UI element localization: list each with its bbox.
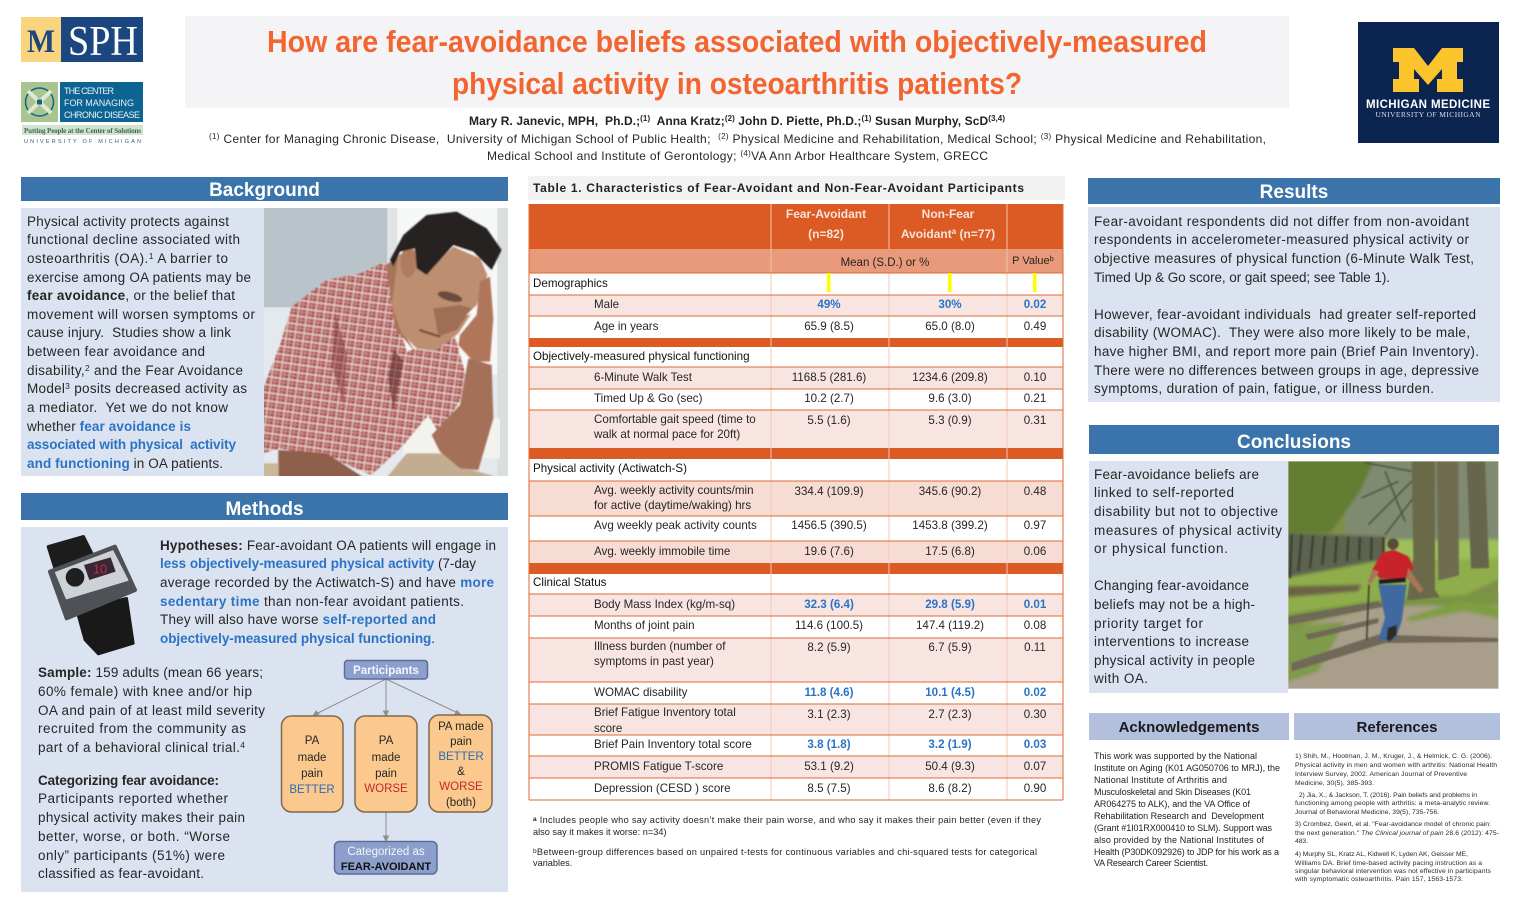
- logo: MSPH: [21, 17, 143, 65]
- panel: references: [1294, 713, 1500, 883]
- table header: Fear-Avoidant: [786, 207, 866, 221]
- text: categorizing fear avoidance: [38, 773, 245, 881]
- text: sample: 60% female) with knee and/or hip: [38, 684, 252, 699]
- logo: Center for Managing Chronic Disease: FOR MANAGING: [64, 98, 134, 108]
- text: background: functional decline associated with: [27, 232, 240, 247]
- row: age: 65.9 (8.5): [804, 320, 854, 333]
- icon: actiwatch: 10: [93, 562, 107, 576]
- heading: methods: Methods: [225, 499, 304, 520]
- text: references: 3) Crombez, Geert, et al. "Fear-avoidance model of chronic pain:: [1295, 821, 1491, 828]
- table footnotes: b: [533, 848, 537, 855]
- authors and affiliations: (4): [740, 149, 751, 158]
- row: gait speed: 5.3 (0.9): [928, 414, 972, 427]
- row: WOMAC: 10.1 (4.5): [925, 686, 975, 699]
- row: pain inventory: 0.03: [1024, 738, 1047, 751]
- row: 6-minute walk: [594, 371, 1046, 384]
- text: sample: 4: [240, 740, 245, 750]
- box: PA made pain better and worse: WORSE: [439, 781, 483, 793]
- table header: Mean (S.D.) or %: [841, 257, 929, 269]
- box: PA made pain better and worse: pain: [450, 736, 472, 748]
- text: sample: Sample: 159 adults (mean 66 years;: [38, 665, 263, 680]
- box: PA made pain worse: [355, 716, 417, 812]
- row: illness burden: 0.11: [1024, 641, 1046, 654]
- text: background: 3: [65, 381, 70, 391]
- box: PA made pain worse: WORSE: [364, 783, 408, 795]
- logo: Center for Managing Chronic Disease: [21, 82, 143, 145]
- text: references: Physical activity in men and women with arthritis: National Health: [1295, 762, 1497, 769]
- row: BMI: 32.3 (6.4): [804, 598, 854, 611]
- text: categorizing fear avoidance: classified as fear-avoidant.: [38, 866, 204, 881]
- box: PA made pain better and worse: (both): [446, 797, 476, 809]
- text: background: [26, 214, 256, 471]
- authors and affiliations: (2): [718, 132, 729, 141]
- heading: references: [1294, 713, 1500, 740]
- row: joint pain: Months of joint pain: [594, 619, 695, 632]
- text: conclusions: physical activity in people: [1094, 653, 1255, 668]
- authors and affiliations: (3): [1041, 132, 1052, 141]
- text: conclusions: priority target for: [1094, 616, 1204, 631]
- box: PA made pain better: made: [298, 752, 326, 764]
- text: references: the next generation." The Clinical journal of pain 28.6 (2012): 475-: [1295, 830, 1499, 837]
- text: sample: [38, 665, 265, 755]
- text: results: Timed Up & Go score, or gait speed; see Table 1).: [1094, 270, 1390, 285]
- table footnotes: variables.: [533, 858, 572, 868]
- row: immobile time: [594, 545, 1046, 558]
- text: background: A barrier to: [154, 251, 228, 266]
- heading: acknowledgements: [1089, 713, 1289, 740]
- row: activity counts: 0.48: [1024, 485, 1046, 498]
- table header: [529, 204, 1063, 273]
- row: male: [594, 298, 1046, 311]
- text: hypotheses: sedentary time than non-fear avoidant patients.: [160, 594, 464, 609]
- photo: man holding his head: [257, 208, 513, 482]
- text: conclusions: linked to self-reported: [1094, 485, 1234, 500]
- row: timed up and go: [594, 392, 1046, 405]
- text: background: whether fear avoidance is: [26, 419, 191, 434]
- row: fatigue inventory: score: [594, 722, 622, 735]
- box: PA made pain worse: PA: [379, 735, 394, 747]
- row: 6-minute walk: 1168.5 (281.6): [792, 371, 866, 384]
- text: sample: recruited from the community as: [38, 721, 246, 736]
- row: immobile time: Avg. weekly immobile time: [594, 545, 730, 558]
- text: references: with symptomatic osteoarthritis. Pain 157, 1563-1573.: [1294, 876, 1463, 883]
- text: hypotheses: objectively-measured physical functioning.: [160, 631, 435, 646]
- row: gait speed: 0.31: [1024, 414, 1046, 427]
- text: acknowledgements: Rehabilitation Research and Development: [1094, 811, 1264, 821]
- table header: Avoidant: [901, 227, 952, 241]
- box: PA made pain better: BETTER: [289, 784, 335, 796]
- logo: Michigan Medicine: UNIVERSITY OF MICHIGAN: [1376, 110, 1481, 119]
- box: categorized as fear-avoidant: FEAR-AVOIDANT: [341, 861, 431, 873]
- text: acknowledgements: also provided by the National Institutes of: [1094, 835, 1264, 845]
- text: acknowledgements: This work was supported by the National: [1094, 751, 1257, 761]
- table title: [528, 176, 1065, 200]
- row: pain inventory: 3.8 (1.8): [807, 738, 851, 751]
- photo: man walking with cane on tree-lined path: [1288, 461, 1498, 689]
- row: PROMIS: 0.07: [1024, 760, 1046, 773]
- table 1: [529, 204, 1063, 800]
- row: depression: 8.5 (7.5): [807, 782, 851, 795]
- logo: MSPH: M: [27, 24, 55, 60]
- panel: background: [21, 177, 513, 482]
- text: background: cause injury. Studies show a link: [27, 325, 231, 340]
- row: fatigue inventory: 2.7 (2.3): [928, 708, 972, 721]
- text: background: posits decreased activity as: [70, 381, 247, 396]
- logo: Center for Managing Chronic Disease: THE CENTER: [64, 86, 114, 96]
- row: age: [594, 320, 1046, 333]
- text: conclusions: disability but not to objective: [1094, 504, 1278, 519]
- row: gait speed: walk at normal pace for 20ft): [593, 428, 740, 441]
- text: conclusions: measures of physical activity: [1094, 523, 1282, 538]
- box: PA made pain better and worse: [429, 715, 492, 812]
- text: results: symptoms, duration of pain, fatigue, or illness burden.: [1094, 381, 1434, 396]
- text: background: between fear avoidance and: [27, 344, 205, 359]
- panel: results: [1088, 178, 1500, 402]
- box: PA made pain better: [282, 716, 343, 812]
- text: results: objective measures of physical function (6-Minute Walk Test,: [1094, 251, 1474, 266]
- heading: methods: [21, 493, 508, 520]
- logo: MSPH: SPH: [68, 19, 138, 65]
- row: WOMAC: WOMAC disability: [594, 686, 688, 699]
- row: PROMIS: PROMIS Fatigue T-score: [594, 760, 723, 773]
- heading: background: [21, 177, 508, 201]
- row: immobile time: 0.06: [1024, 545, 1046, 558]
- text: hypotheses: Hypotheses: Fear-avoidant OA patients will engage in: [160, 538, 496, 553]
- table header: b: [1050, 254, 1054, 263]
- text: conclusions: or physical function.: [1094, 541, 1228, 556]
- row: peak counts: Avg weekly peak activity counts: [594, 519, 757, 532]
- heading: results: Results: [1260, 182, 1328, 203]
- box: categorized as fear-avoidant: [334, 842, 437, 874]
- text: results: [1094, 214, 1479, 396]
- text: categorizing fear avoidance: only” participants (51%) were: [38, 848, 225, 863]
- row: gait speed: Comfortable gait speed (time to: [594, 413, 756, 426]
- text: background: fear avoidance, or the belief that: [27, 288, 235, 303]
- logo: Center for Managing Chronic Disease: UNIVERSITY OF MICHIGAN: [24, 139, 141, 145]
- text: background: osteoarthritis (OA).: [27, 251, 148, 266]
- row: illness burden: 6.7 (5.9): [928, 641, 972, 654]
- table header: Non-Fear: [922, 207, 975, 221]
- table header: (n=82): [808, 227, 844, 241]
- text: results: disability (WOMAC). They were also more likely to be male,: [1094, 325, 1470, 340]
- row: pain inventory: 3.2 (1.9): [928, 738, 972, 751]
- text: conclusions: interventions to increase: [1094, 634, 1249, 649]
- text: background: Model: [27, 381, 65, 396]
- text: categorizing fear avoidance: Categorizing fear avoidance:: [38, 773, 219, 788]
- text: hypotheses: less objectively-measured physical activity (7-day: [160, 556, 476, 571]
- row: PROMIS: 50.4 (9.3): [925, 760, 975, 773]
- row: fatigue inventory: 0.30: [1024, 708, 1046, 721]
- row: male: 49%: [817, 298, 841, 311]
- table footnotes: also say it makes it worse: n=34): [533, 827, 667, 837]
- text: acknowledgements: VA Research Career Scientist.: [1094, 858, 1208, 868]
- authors and affiliations: Medical School and Institute of Gerontology;: [487, 149, 736, 163]
- row: age: 0.49: [1024, 320, 1046, 333]
- text: results: There were no differences between groups in age, depressive: [1094, 363, 1479, 378]
- text: references: 1) Shih, M., Hootman, J. M., Kruger, J., & Helmick, C. G. (2006).: [1295, 753, 1492, 760]
- logo: Center for Managing Chronic Disease: Putting People at the Center of Solutions: [24, 127, 141, 135]
- authors and affiliations: [209, 114, 1266, 163]
- text: conclusions: [1093, 467, 1282, 686]
- row: timed up and go: 9.6 (3.0): [928, 392, 972, 405]
- text: sample: OA and pain of at least mild severity: [38, 703, 265, 718]
- row: 6-minute walk: 1234.6 (209.8): [912, 371, 988, 384]
- text: background: 1: [149, 251, 154, 261]
- authors and affiliations: (1): [640, 114, 650, 123]
- section: demographics: Demographics: [533, 277, 608, 290]
- text: conclusions: with OA.: [1093, 671, 1148, 686]
- text: background: associated with physical activity: [27, 437, 236, 452]
- arrows: [313, 679, 461, 841]
- row: BMI: 29.8 (5.9): [925, 598, 975, 611]
- text: references: 4) Murphy SL, Kratz AL, Kidwell K, Lyden AK, Geisser ME,: [1295, 851, 1468, 858]
- box: PA made pain better and worse: &: [457, 766, 465, 778]
- text: background: and the Fear Avoidance: [90, 363, 243, 378]
- row: gait speed: 5.5 (1.6): [807, 414, 851, 427]
- box: participants: [344, 660, 428, 679]
- box: categorized as fear-avoidant: Categorized as: [347, 846, 425, 858]
- logo: Michigan Medicine: MICHIGAN MEDICINE: [1366, 99, 1490, 111]
- row fills: [529, 204, 1063, 800]
- row: fatigue inventory: Brief Fatigue Inventory total: [594, 706, 736, 719]
- text: acknowledgements: National Institute of Arthritis and: [1094, 775, 1227, 785]
- authors and affiliations: Center for Managing Chronic Disease, University of Michigan School of Public Health;: [220, 132, 718, 146]
- text: references: 2) Jia, X., & Jackson, T. (2016). Pain beliefs and problems in: [1297, 792, 1477, 799]
- box: PA made pain better and worse: PA made: [438, 721, 484, 733]
- text: results: However, fear-avoidant individuals had greater self-reported: [1094, 307, 1476, 322]
- row: depression: Depression (CESD ) score: [594, 782, 731, 795]
- authors and affiliations: (1): [862, 114, 872, 123]
- row: depression: 8.6 (8.2): [928, 782, 972, 795]
- text: references: 483.: [1295, 838, 1308, 845]
- text: references: Williams DA. Brief time-based activity pacing instruction as a: [1295, 860, 1482, 867]
- table title: Table 1. Characteristics of Fear-Avoidant and Non-Fear-Avoidant Participants: [533, 181, 1024, 195]
- box: PA made pain better and worse: BETTER: [438, 751, 484, 763]
- row: timed up and go: 10.2 (2.7): [804, 392, 854, 405]
- text: background: and functioning in OA patients.: [27, 456, 223, 471]
- text: references: singular behavioral intervention was not effective in participants: [1295, 868, 1492, 875]
- text: references: Interview Survey, 2002. American Journal of Preventive: [1295, 771, 1467, 778]
- row: BMI: Body Mass Index (kg/m-sq): [594, 598, 735, 611]
- row: pain inventory: [594, 738, 1047, 751]
- table footnotes: Between-group differences based on unpaired t-tests for continuous variables and chi-squared tests for categorical: [537, 847, 1037, 857]
- table header: P Value: [1012, 255, 1050, 267]
- table header: a: [952, 227, 957, 236]
- row: WOMAC: 0.02: [1024, 686, 1046, 699]
- row: gait speed: [593, 413, 1046, 441]
- text: references: Medicine, 30(5), 385-393.: [1295, 780, 1374, 787]
- row: peak counts: 0.97: [1024, 519, 1046, 532]
- heading: conclusions: Conclusions: [1237, 432, 1351, 453]
- section: clinical status: Clinical Status: [533, 576, 607, 589]
- text: acknowledgements: Musculoskeletal and Skin Diseases (K01: [1094, 787, 1251, 797]
- row: fatigue inventory: 3.1 (2.3): [807, 708, 851, 721]
- heading: conclusions: [1089, 425, 1499, 454]
- row: WOMAC: [594, 686, 1046, 699]
- row: immobile time: 17.5 (6.8): [925, 545, 975, 558]
- section: objectively-measured physical functioning: Objectively-measured physical functioning: [533, 350, 750, 363]
- heading: acknowledgements: Acknowledgements: [1119, 719, 1259, 736]
- table header: (n=77): [956, 227, 995, 241]
- authors and affiliations: (3,4): [988, 114, 1005, 123]
- text: background: exercise among OA patients may be: [27, 270, 251, 285]
- row: activity counts: 345.6 (90.2): [919, 485, 981, 498]
- row: pain inventory: Brief Pain Inventory total score: [594, 738, 752, 751]
- text: references: [1294, 753, 1499, 883]
- authors and affiliations: John D. Piette, Ph.D.;: [735, 114, 861, 128]
- table footnotes: Includes people who say activity doesn’t make their pain worse, and who say it makes their pain better (even if they: [537, 815, 1041, 825]
- row: male: Male: [594, 298, 619, 311]
- authors and affiliations: Physical Medicine and Rehabilitation,: [1052, 132, 1266, 146]
- table footnotes: [533, 815, 1041, 868]
- row: activity counts: 334.4 (109.9): [795, 485, 864, 498]
- text: acknowledgements: AR064275 to ALK), and the VA Office of: [1094, 799, 1250, 809]
- row: joint pain: [594, 619, 1046, 632]
- text: background: Physical activity protects against: [27, 214, 229, 229]
- text: acknowledgements: (Grant #1I01RX000410 to SLM). Support was: [1094, 823, 1272, 833]
- text: acknowledgements: Health (P30DK092926) to JDP for his work as a: [1094, 847, 1279, 857]
- authors and affiliations: Susan Murphy, ScD: [872, 114, 988, 128]
- title: [185, 16, 1289, 108]
- authors and affiliations: (1): [209, 132, 220, 141]
- row: activity counts: [594, 484, 1046, 512]
- authors and affiliations: Anna Kratz;: [650, 114, 725, 128]
- box: PA made pain worse: made: [372, 752, 400, 764]
- row: PROMIS: [594, 760, 1046, 773]
- row: illness burden: 8.2 (5.9): [807, 641, 851, 654]
- panel: conclusions: [1089, 425, 1512, 698]
- box: participants: Participants: [353, 665, 419, 677]
- row: age: 65.0 (8.0): [925, 320, 975, 333]
- row: peak counts: [594, 519, 1046, 532]
- row: timed up and go: 0.21: [1024, 392, 1046, 405]
- row: 6-minute walk: 0.10: [1024, 371, 1046, 384]
- section: physical activity: Physical activity (Actiwatch-S): [533, 462, 687, 475]
- text: conclusions: Fear-avoidance beliefs are: [1094, 467, 1259, 482]
- authors and affiliations: (2): [725, 114, 735, 123]
- row: timed up and go: Timed Up & Go (sec): [594, 392, 703, 405]
- flow diagram: [282, 660, 492, 874]
- box: PA made pain better: pain: [301, 768, 323, 780]
- row: illness burden: Illness burden (number of: [594, 640, 726, 653]
- row: immobile time: 19.6 (7.6): [804, 545, 854, 558]
- text: hypotheses: [160, 538, 496, 646]
- icon: actiwatch: [48, 537, 135, 654]
- table footnotes: a: [533, 816, 537, 823]
- text: results: respondents in accelerometer-measured physical activity or: [1094, 232, 1470, 247]
- text: background: 2: [85, 363, 90, 373]
- row: male: 0.02: [1024, 298, 1046, 311]
- text: categorizing fear avoidance: better, worse, or both. “Worse: [38, 829, 230, 844]
- text: conclusions: beliefs may not be a high-: [1094, 597, 1255, 612]
- text: background: a mediator. Yet we do not know: [27, 400, 228, 415]
- text: results: Fear-avoidant respondents did not differ from non-avoidant: [1094, 214, 1469, 229]
- authors and affiliations: Physical Medicine and Rehabilitation, Medical School;: [729, 132, 1040, 146]
- box: PA made pain worse: pain: [375, 768, 397, 780]
- row: joint pain: 0.08: [1024, 619, 1046, 632]
- text: background: movement will worsen symptoms or: [27, 307, 256, 322]
- box: PA made pain better: PA: [305, 735, 320, 747]
- text: hypotheses: They will also have worse self-reported and: [160, 612, 436, 627]
- row: depression: [594, 782, 1046, 795]
- row: activity counts: for active (daytime/waking) hrs: [594, 499, 751, 512]
- row: PROMIS: 53.1 (9.2): [804, 760, 854, 773]
- text: references: functioning among people with arthritis: a meta-analytic review.: [1295, 800, 1490, 807]
- logo: Michigan Medicine: [1358, 22, 1499, 143]
- heading: references: References: [1357, 719, 1437, 736]
- heading: results: [1088, 178, 1500, 204]
- row: age: Age in years: [594, 320, 659, 333]
- row: depression: 0.90: [1024, 782, 1046, 795]
- row: BMI: [594, 598, 1047, 611]
- text: conclusions: Changing fear-avoidance: [1094, 578, 1249, 593]
- text: acknowledgements: [1094, 751, 1280, 868]
- logo: Center for Managing Chronic Disease: CHRONIC DISEASE: [64, 110, 140, 120]
- text: references: Journal of Behavioral Medicine, 39(5), 735-756.: [1295, 809, 1439, 816]
- row: illness burden: [594, 640, 1046, 668]
- row: peak counts: 1453.8 (399.2): [912, 519, 988, 532]
- text: categorizing fear avoidance: Participants reported whether: [38, 791, 228, 806]
- authors and affiliations: VA Ann Arbor Healthcare System, GRECC: [751, 149, 988, 163]
- panel: acknowledgements: [1089, 713, 1289, 868]
- text: hypotheses: average recorded by the Actiwatch-S) and have more: [160, 575, 494, 590]
- text: sample: part of a behavioral clinical trial.: [38, 740, 240, 755]
- authors and affiliations: Mary R. Janevic, MPH, Ph.D.;: [469, 114, 640, 128]
- yellow markers: [827, 273, 1036, 292]
- row: joint pain: 147.4 (119.2): [916, 619, 984, 632]
- text: results: have higher BMI, and report more pain (Brief Pain Inventory).: [1094, 344, 1479, 359]
- heading: background: Background: [209, 180, 320, 201]
- row: 6-minute walk: 6-Minute Walk Test: [594, 371, 693, 384]
- text: categorizing fear avoidance: physical activity makes their pain: [38, 810, 245, 825]
- row: WOMAC: 11.8 (4.6): [805, 686, 854, 699]
- row: joint pain: 114.6 (100.5): [795, 619, 863, 632]
- panel: methods: [21, 493, 508, 892]
- text: acknowledgements: Institute on Aging (K01 AG050706 to MRJ), the: [1094, 763, 1280, 773]
- row: BMI: 0.01: [1024, 598, 1047, 611]
- row: illness burden: symptoms in past year): [594, 655, 714, 668]
- row: male: 30%: [938, 298, 962, 311]
- row: fatigue inventory: [594, 706, 1046, 735]
- row: activity counts: Avg. weekly activity counts/min: [594, 484, 754, 497]
- title: physical activity in osteoarthritis patients?: [452, 66, 1022, 101]
- text: background: disability,: [27, 363, 85, 378]
- row: peak counts: 1456.5 (390.5): [791, 519, 867, 532]
- title: How are fear-avoidance beliefs associated with objectively-measured: [267, 24, 1207, 59]
